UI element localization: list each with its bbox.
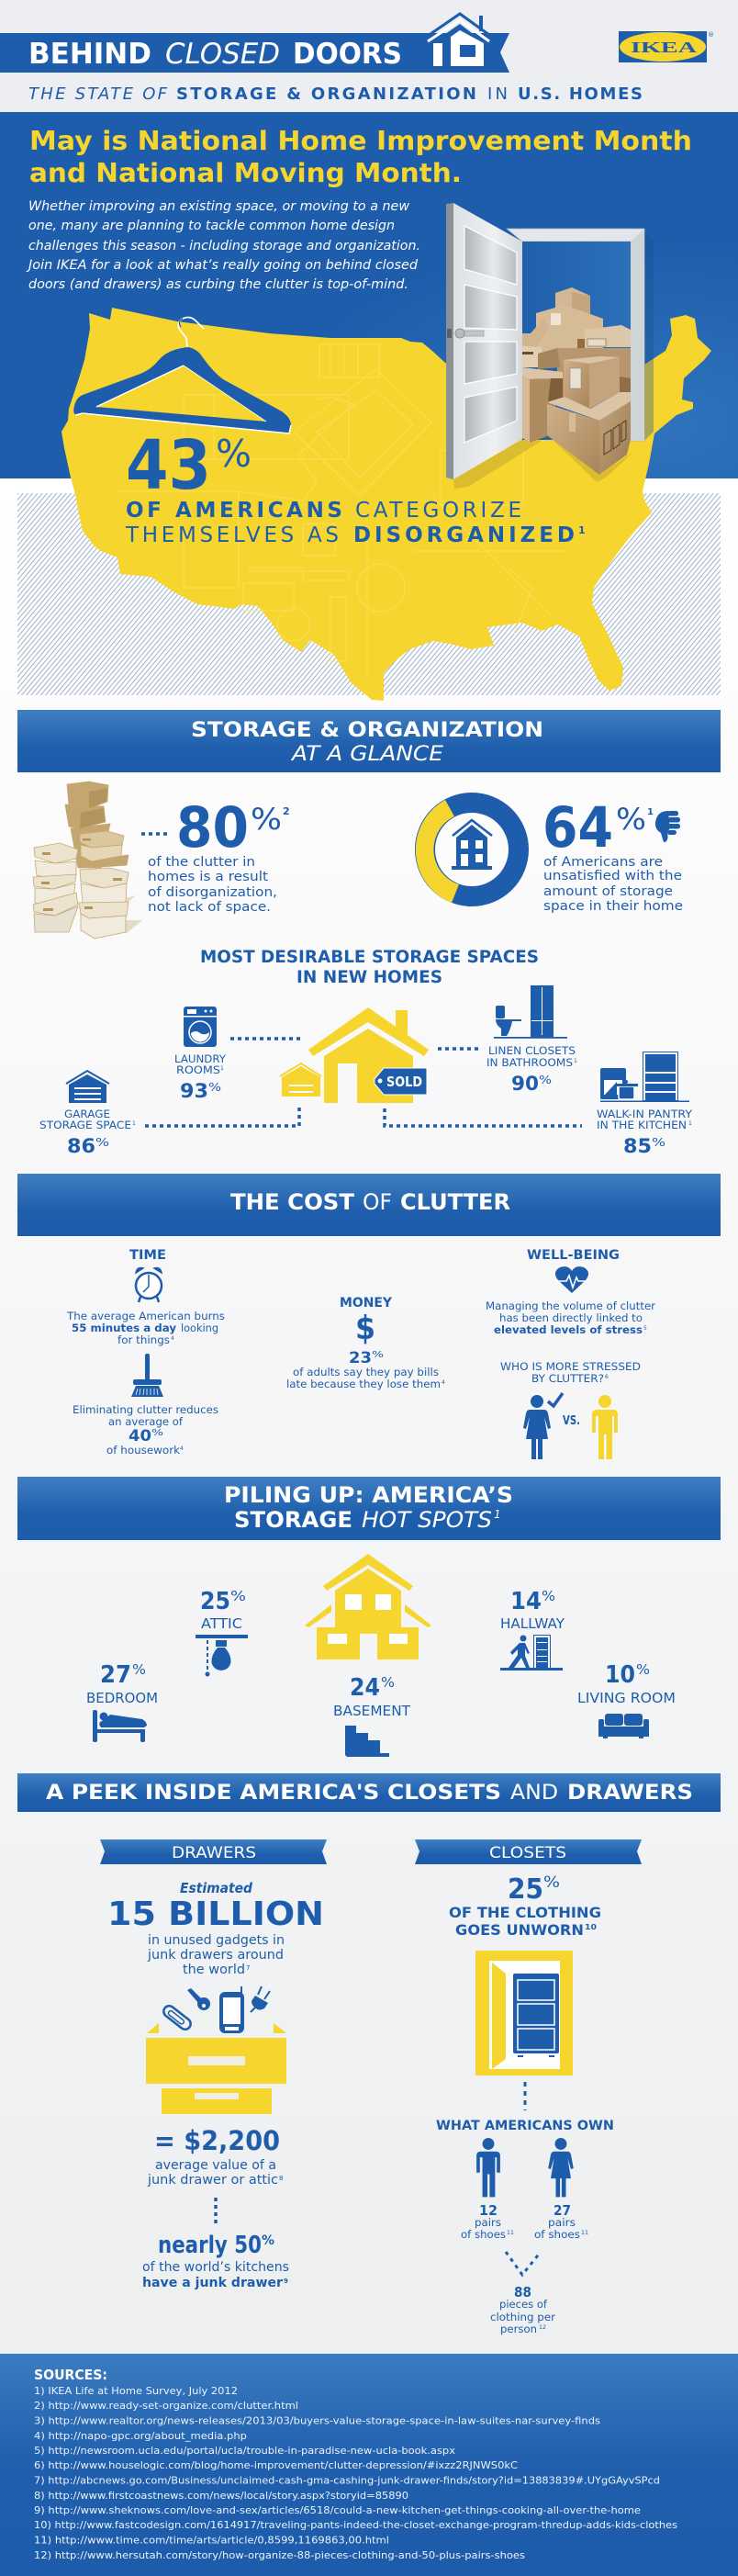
icon: person by door [500,1635,563,1670]
section header: cost of clutter: CLUTTER [400,1189,510,1215]
stat: nearly 50 percent: nearly 50 [158,2232,262,2259]
icon: woman with check [523,1393,563,1459]
column: time: for things [117,1333,170,1346]
small garage [280,1063,321,1097]
stat: women 27 pairs of shoes: 11 [581,2230,588,2236]
item: hallway: HALLWAY [500,1615,565,1632]
stat: 43 percent disorganized: THEMSELVES AS [125,523,339,547]
icon: gadgets above drawer [162,1986,270,2033]
column: time: 4 [180,1445,184,1452]
intro heading [29,126,692,188]
heading: most desirable storage spaces: IN NEW HOMES [296,968,442,987]
stat: 80 percent: 2 [283,805,290,817]
icon: heart with pulse [555,1266,588,1293]
item: walk-in pantry: IN THE KITCHEN [597,1119,687,1131]
item: bedroom: 27 [100,1661,131,1689]
key [187,1988,210,2010]
stat: nearly 50 percent: 9 [284,2278,288,2285]
panel: blue intro background [0,112,738,478]
stat: 15 billion: the world [183,1963,245,1977]
stat: 2200 dollar value: junk drawer or attic [147,2173,278,2188]
column: time: 55 minutes a day [72,1322,177,1334]
icon: yellow two-storey house [305,1554,431,1659]
column: time: looking [181,1322,218,1334]
item: walk-in pantry: WALK-IN PANTRY [597,1108,693,1120]
US map [62,308,711,701]
stat: 88 pieces of clothing: pieces of [499,2298,548,2311]
column: money: of adults say they pay bills [293,1366,439,1378]
column: time: of housework [106,1444,180,1457]
stat: women 27 pairs of shoes: of shoes [534,2228,580,2241]
stat: 64 percent: % [616,802,646,837]
item: linen closets: 1 [574,1058,577,1064]
column: time: TIME [129,1248,166,1263]
column: well-being: has been directly linked to [499,1311,643,1324]
item: hallway [500,1588,565,1670]
column: well-being: elevated levels of stress [494,1323,643,1336]
stat: men 12 pairs of shoes: of shoes [461,2228,506,2241]
donut chart: 64 percent [416,800,519,903]
icon: open door with boxes [446,203,654,489]
boxes [522,287,631,475]
stat: 15 billion: 7 [246,1964,250,1972]
intro text block [26,199,420,292]
item: walk-in pantry [597,1052,693,1157]
column: time: an average of [108,1415,184,1428]
icon: house [452,820,492,870]
item: linen closets: 90 [511,1073,539,1095]
stat: 2200 dollar value: average value of a [155,2158,276,2173]
source list: 5) http://newsroom.ucla.edu/portal/ucla/trouble-in-paradise-new-ucla-book.aspx [34,2446,455,2457]
source list: 6) http://www.houselogic.com/blog/home-improvement/clutter-depression/#ixzz2RJNWS0kC [34,2460,518,2471]
item: laundry rooms: 93 [180,1080,208,1102]
phone [219,1986,244,2033]
stat: 25 percent clothing unworn: 25 [508,1873,543,1906]
source list: 3) http://www.realtor.org/news-releases/2013/03/buyers-value-storage-space-in-law-suites-nar-survey-finds [34,2415,600,2426]
stat: 43 percent disorganized: CATEGORIZE [355,499,521,523]
icon: bed [93,1710,147,1742]
icon: dollar sign: $ [355,1310,375,1347]
column: well-being: BY CLUTTER? [531,1372,604,1385]
dotted connector [214,2198,218,2227]
column: money: 4 [442,1379,445,1386]
heading: what Americans own: WHAT AMERICANS OWN [436,2119,614,2133]
stat: 25 percent clothing unworn: % [543,1873,560,1892]
SOLD tag [375,1068,427,1095]
stat: 25 percent clothing unworn: OF THE CLOTHING [449,1904,601,1921]
stat: men 12 pairs of shoes: pairs [475,2216,501,2229]
item: basement: % [381,1674,395,1691]
stat: 2200 dollar value: 8 [279,2175,283,2182]
subtitle: THE STATE OF [28,84,168,104]
stat: nearly 50 percent: of the world’s kitchens [142,2260,289,2275]
source list: 12) http://www.hersutah.com/story/how-organize-88-pieces-clothing-and-50-plus-pairs-shoes [34,2550,525,2561]
icon: central sold house [280,1007,429,1103]
stat: 64 percent: space in their home [543,899,683,914]
icon: toilet and cabinet [494,985,567,1039]
panel: sources: SOURCES: [34,2367,107,2383]
item: living room: LIVING ROOM [577,1690,676,1706]
item: linen closets [486,985,577,1095]
intro text block: Whether improving an existing space, or moving to a new [28,199,409,214]
source list: 8) http://www.firstcoastnews.com/news/local/story.aspx?storyid=85890 [34,2491,408,2502]
item: attic: % [230,1588,246,1604]
stat: 88 pieces of clothing: person [500,2323,537,2335]
stat: 64 percent: 1 [647,807,654,817]
stat: 80 percent: homes is a result [148,870,269,884]
icon: clothes hanger [73,318,291,433]
column: money: late because they lose them [286,1378,441,1390]
stat: 15 billion [107,1880,324,1977]
item: attic: ATTIC [201,1615,242,1632]
stat: 88 pieces of clothing: 88 [514,2284,531,2300]
item: linen closets: IN BATHROOMS [486,1056,573,1069]
stat: nearly 50 percent: have a junk drawer [142,2276,283,2290]
IKEA logo: IKEA [631,39,698,56]
column: well-being: WHO IS MORE STRESSED [500,1360,641,1373]
source list: 11) http://www.time.com/time/arts/article/0,8599,1169863,00.html [34,2535,389,2546]
item: bedroom: % [132,1661,146,1678]
connector lines [145,1039,582,1126]
item: laundry rooms [174,1007,227,1102]
stat: 25 percent clothing unworn: GOES UNWORN [455,1921,584,1939]
ribbon: drawers: DRAWERS [172,1844,256,1862]
icon: stairs [345,1726,389,1757]
stat: men 12 pairs of shoes [461,2138,514,2241]
stat: 15 billion: 15 BILLION [107,1895,324,1933]
item: living room: 10 [605,1661,635,1689]
dotted connector [523,2082,527,2110]
title: BEHIND [28,38,151,71]
icon: yellow drawers [146,2023,286,2114]
subtitle [28,84,643,104]
IKEA logo: ® [708,31,714,39]
item: laundry rooms: ROOMS [176,1063,220,1076]
icon: man in yellow [592,1395,618,1459]
section header: peek inside: A PEEK INSIDE AMERICA'S CLOSETS [46,1782,501,1805]
heading: most desirable storage spaces: MOST DESIRABLE STORAGE SPACES [200,948,539,967]
stat: 80 percent: of disorganization, [148,885,277,900]
source list [34,2386,677,2561]
section header: piling up: HOT SPOTS [362,1507,492,1533]
item: attic [196,1588,248,1677]
section header: piling up: STORAGE [234,1507,352,1533]
icon: broom [131,1354,163,1397]
item: walk-in pantry: 1 [688,1120,692,1127]
stat: 88 pieces of clothing: clothing per [490,2311,555,2323]
stat: 15 billion: Estimated [180,1880,252,1896]
subtitle: STORAGE & ORGANIZATION [176,84,476,104]
item: garage storage: GARAGE [64,1108,110,1120]
stat: 88 pieces of clothing [490,2284,555,2335]
column: time: % [151,1428,163,1438]
IKEA logo [619,31,714,62]
subtitle: U.S. HOMES [518,84,643,104]
stat: 43 percent disorganized: 43 [126,426,211,505]
icon: sofa [598,1714,649,1738]
section header: peek inside: AND [510,1782,558,1805]
item: linen closets: LINEN CLOSETS [488,1044,576,1057]
column: money: MONEY [340,1296,392,1310]
item: garage storage: 86 [67,1135,95,1157]
icon: closet with cabinet [475,1951,573,2075]
section header: piling up: PILING UP: AMERICA’S [224,1482,513,1508]
source list: 2) http://www.ready-set-organize.com/clutter.html [34,2401,298,2412]
blueprint lines on map [119,344,569,680]
intro heading: and National Moving Month. [29,158,462,188]
intro text block: doors (and drawers) as curbing the clutter is top-of-mind. [28,277,408,292]
item: garage storage: % [95,1136,109,1149]
ribbon: closets: CLOSETS [489,1844,566,1862]
stat: 64 percent [542,795,683,914]
icon: pantry and stove [600,1052,689,1102]
icon: house on banner [428,14,489,66]
column: well-being: Managing the volume of clutter [486,1299,655,1312]
item: bedroom [86,1661,158,1742]
header banner [0,33,509,73]
item: garage storage: STORAGE SPACE [39,1119,131,1131]
item: garage storage [39,1071,136,1157]
section header: piling up: 1 [494,1508,501,1521]
hatch panel [17,493,721,695]
column: time [66,1248,225,1457]
source list: 9) http://www.sheknows.com/love-and-sex/articles/6518/could-a-new-kitchen-get-things-cooking-all-over-the-home [34,2505,641,2516]
item: laundry rooms: LAUNDRY [174,1052,227,1065]
section header: cost of clutter: OF [363,1189,392,1215]
title: DOORS [293,38,402,71]
section header: cost of clutter [17,1174,721,1236]
stat: women 27 pairs of shoes: pairs [548,2216,576,2229]
stat: men 12 pairs of shoes: 12 [479,2202,498,2219]
source list: 7) http://abcnews.go.com/Business/unclaimed-cash-gma-cashing-junk-drawer-finds/story?id=13883839#.UYgGAyvSPcd [34,2476,660,2487]
paper clip [162,2004,193,2031]
stat: 80 percent: % [251,802,282,837]
item: basement [333,1674,411,1757]
dotted connector [141,832,171,836]
stat: 80 percent: 80 [176,795,249,861]
intro heading: May is National Home Improvement Month [29,126,692,156]
title: CLOSED [165,38,280,71]
dotted V connector [506,2252,541,2275]
stat: 15 billion: junk drawers around [147,1948,284,1963]
icon: hanging bulb [196,1635,248,1677]
column: well-being: WELL-BEING [527,1248,620,1263]
stat: 64 percent: unsatisfied with the [543,869,682,883]
icon: alarm clock [136,1268,162,1302]
column: well-being: 5 [643,1325,647,1332]
icon: garage [66,1071,109,1103]
section header: cost of clutter: THE COST [230,1189,355,1215]
icon: thumbs down [655,811,680,842]
intro text block: challenges this season - including storage and organization. [28,239,420,253]
door leaf [446,203,522,479]
item: garage storage: 1 [132,1120,136,1127]
item: linen closets: % [539,1074,552,1086]
section header: storage and organization [17,710,721,772]
item: basement: BASEMENT [333,1703,411,1719]
panel: sources [0,2354,738,2576]
item: laundry rooms: % [208,1081,221,1094]
item: hallway: % [542,1588,555,1604]
item: attic: 25 [200,1588,230,1615]
stat: men 12 pairs of shoes: 11 [507,2230,514,2236]
stat: 64 percent: of Americans are [543,855,663,870]
icon: stacked boxes [33,782,142,939]
stat: 43 percent disorganized [125,426,586,547]
stat: 2200 dollar value [147,2125,283,2188]
item: living room [577,1661,676,1738]
stat: 43 percent disorganized: OF AMERICANS [126,499,342,523]
ribbon: drawers [100,1839,327,1864]
section header: storage and organization: AT A GLANCE [290,742,444,766]
stat: women 27 pairs of shoes [534,2138,588,2241]
item: basement: 24 [350,1674,380,1702]
ribbon: closets [415,1839,642,1864]
stat: 64 percent: 64 [542,795,613,861]
section header: piling up [17,1477,721,1540]
column: well-being [486,1248,655,1459]
column: time: The average American burns [66,1310,225,1322]
column: money [286,1296,445,1390]
item: laundry rooms: 1 [220,1065,224,1072]
stat: 88 pieces of clothing: 12 [539,2324,546,2331]
stat: 43 percent disorganized: 1 [578,524,586,536]
stat: 2200 dollar value: = $2,200 [154,2125,280,2156]
item: walk-in pantry: 85 [623,1135,652,1157]
stat: 80 percent [141,795,290,915]
stat: nearly 50 percent: % [262,2233,274,2248]
column: well-being: 6 [605,1374,609,1380]
plug [251,1986,270,2012]
stat: 80 percent: not lack of space. [148,900,271,915]
stat: 43 percent disorganized: % [216,432,252,476]
icon: washing machine [184,1007,217,1047]
column: time: 4 [171,1335,174,1342]
item: living room: % [636,1661,650,1678]
section header: storage and organization: STORAGE & ORGANIZATION [191,718,543,742]
item: hallway: 14 [510,1588,542,1615]
stat: women 27 pairs of shoes: 27 [554,2202,571,2219]
source list: 10) http://www.fastcodesign.com/1614917/traveling-pants-indeed-the-closet-exchange-program-thredup-adds-kids-clothes [34,2520,677,2531]
stat: 64 percent: amount of storage [543,884,673,899]
stat: 43 percent disorganized: DISORGANIZED [353,523,575,547]
section header: peek inside [17,1773,721,1812]
stat: 15 billion: in unused gadgets in [148,1933,285,1948]
source list: 1) IKEA Life at Home Survey, July 2012 [34,2386,238,2397]
intro text block: Join IKEA for a look at what’s really going on behind closed [26,258,419,273]
stat: 25 percent clothing unworn [449,1873,601,1939]
title [28,38,402,71]
source list: 4) http://napo-gpc.org/about_media.php [34,2431,247,2442]
item: bedroom: BEDROOM [86,1690,158,1706]
item: walk-in pantry: % [652,1136,665,1149]
column: time: 40 [129,1427,151,1445]
stat: nearly 50 percent [142,2232,289,2290]
section header: peek inside: DRAWERS [567,1782,693,1805]
heading: most desirable storage spaces [200,948,539,987]
subtitle: IN [487,84,508,104]
intro text block: one, many are planning to tackle common home design [28,219,395,233]
column: money: 23 [349,1349,372,1367]
stat: 80 percent: of the clutter in [148,855,255,870]
stat: 25 percent clothing unworn: 10 [585,1923,597,1931]
SOLD tag: SOLD [386,1074,422,1090]
column: money: % [372,1350,384,1360]
column: well-being: VS. [563,1414,580,1428]
column: time: Eliminating clutter reduces [73,1403,218,1416]
